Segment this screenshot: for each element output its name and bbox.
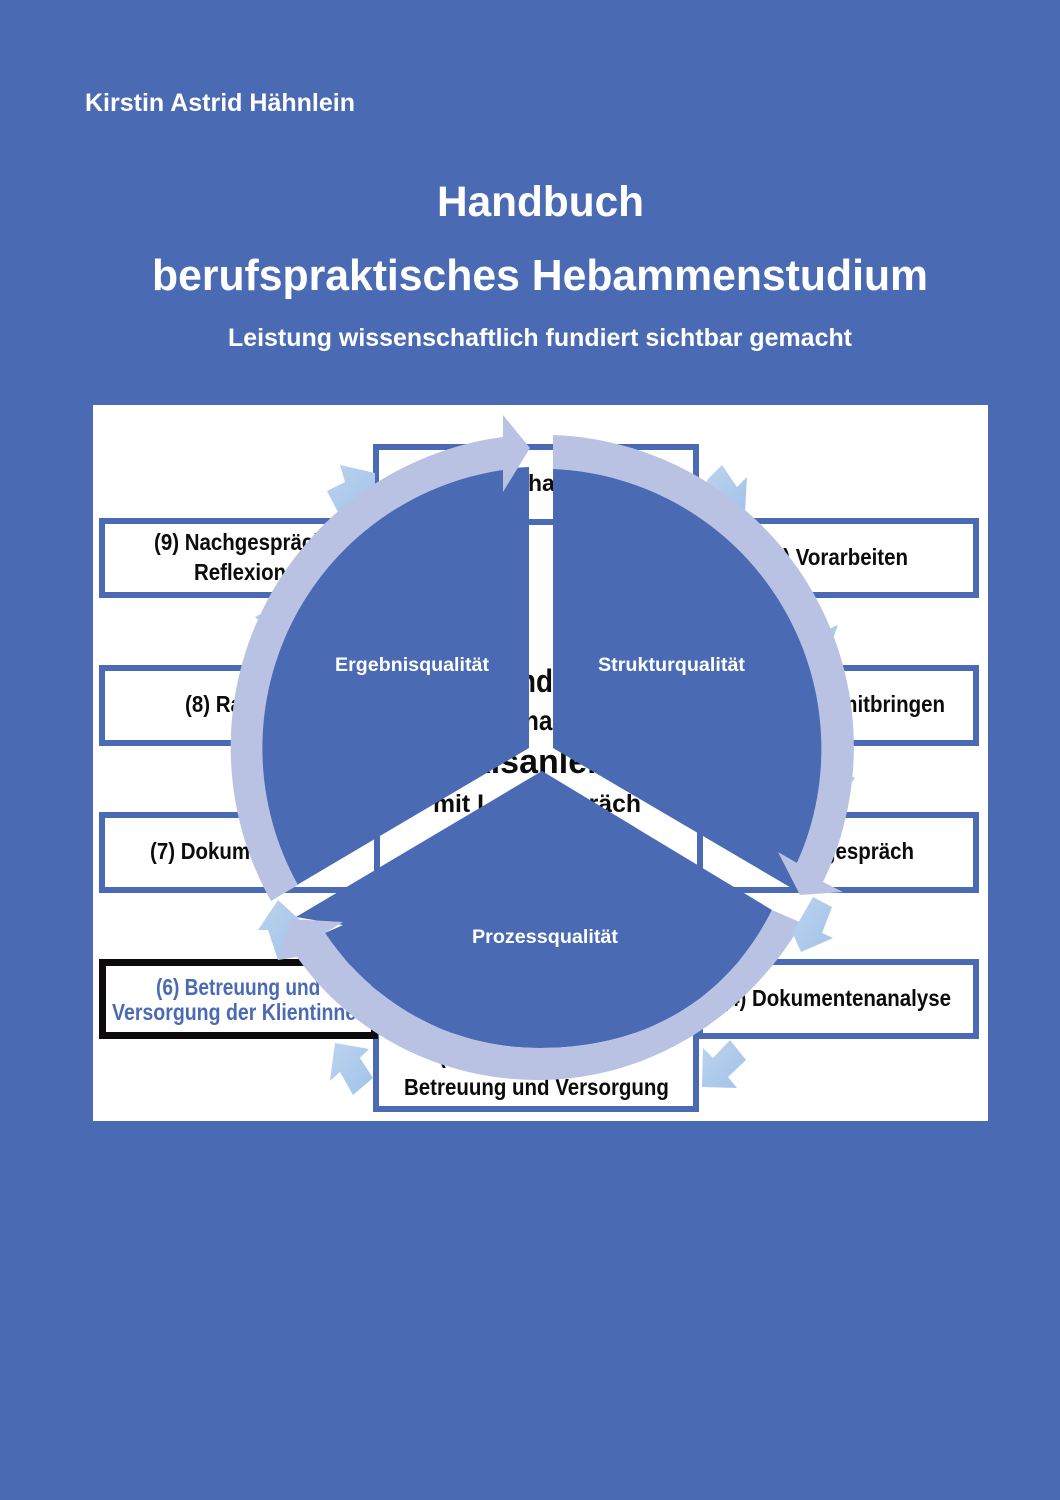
centre text — [417, 664, 670, 818]
box: step 7: (7) Dokum — [150, 838, 250, 864]
box: top centre — [376, 447, 696, 522]
arrow: left — [258, 900, 302, 960]
ring arrow: Prozess — [278, 910, 802, 1080]
box: step 4 — [700, 962, 976, 1036]
centre text: mit Lerngespräch — [433, 790, 641, 818]
box: bottom centre: (5) — [439, 1042, 464, 1068]
box: bottom centre — [376, 1030, 696, 1109]
arrow: bottom right — [702, 1040, 746, 1088]
subtitle: Leistung wissenschaftlich fundiert sichtbar gemacht — [228, 324, 853, 352]
box: step 6 highlighted: (6) Betreuung und — [156, 975, 320, 1000]
box: step 6 highlighted — [102, 962, 374, 1036]
sector: Prozessqualität — [296, 771, 772, 1048]
box: step 6 highlighted: Versorgung der Klientinnen — [112, 1000, 368, 1025]
ring arrow: Ergebnis — [231, 415, 530, 901]
box: step 3: gespräch — [823, 838, 914, 864]
label: Strukturqualität: Strukturqualität — [598, 654, 745, 676]
box: step 1 — [700, 521, 976, 595]
centre text: na — [524, 704, 553, 736]
box: step 4: (4) Dokumentenanalyse — [721, 985, 951, 1011]
arrow: bottom left — [330, 1043, 373, 1095]
label: Ergebnisqualität: Ergebnisqualität — [335, 654, 489, 676]
box: step 8: (8) Ra — [185, 691, 243, 717]
title: Handbuch — [437, 178, 644, 226]
centre text: nd — [519, 664, 553, 699]
box: bottom centre: Betreuung und Versorgung — [404, 1074, 669, 1100]
arrow: top right — [707, 465, 747, 512]
box: step 9 — [102, 521, 377, 595]
ring arrow: Struktur — [553, 435, 854, 895]
box: step 3 — [700, 815, 976, 890]
arrow: upper right small — [812, 625, 838, 652]
author name: Kirstin Astrid Hähnlein — [85, 89, 355, 117]
arrow: middle right small — [843, 772, 855, 794]
label: Prozessqualität: Prozessqualität — [472, 926, 618, 948]
diagram panel — [93, 405, 988, 1121]
title: berufspraktisches Hebammenstudium — [152, 252, 928, 300]
box: step 9: Reflexion — [194, 559, 286, 585]
sector: Strukturqualität — [553, 467, 822, 893]
box: step 1: (1) Vorarbeiten — [765, 544, 908, 570]
box: step 7 — [102, 815, 377, 890]
sector: Ergebnisqualität — [261, 467, 529, 885]
box: top centre: ha — [528, 470, 555, 496]
arrow: upper left small — [255, 608, 272, 632]
title — [152, 178, 928, 300]
box: step 2: mitbringen — [839, 691, 945, 717]
centre text: Praxisanleitung — [417, 743, 670, 781]
box: step 8 — [102, 668, 377, 743]
box: step 2 — [700, 668, 976, 743]
box: step 9: (9) Nachgespräch — [154, 529, 326, 555]
arrow: top left — [327, 465, 375, 516]
arrow: lower right — [793, 897, 833, 952]
